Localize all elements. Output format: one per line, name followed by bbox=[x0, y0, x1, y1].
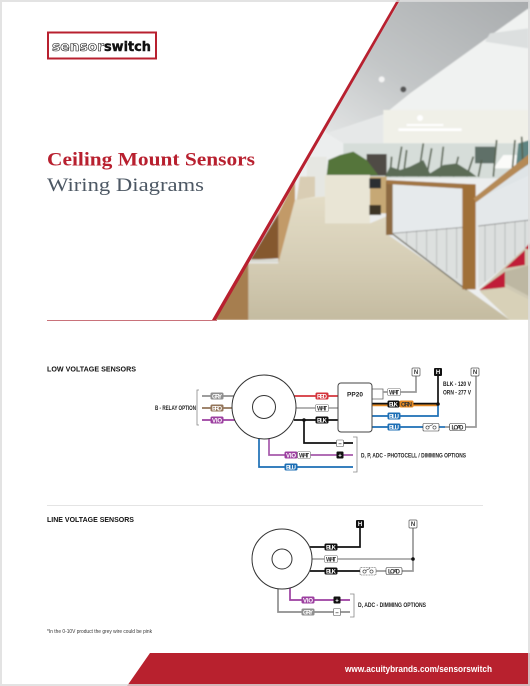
switch symbol bbox=[360, 568, 376, 575]
terminals H N: H bbox=[358, 522, 362, 528]
plus and minus terminals: – bbox=[335, 610, 339, 616]
label: voltages: BLK - 120 V bbox=[443, 381, 472, 388]
terminals H N bbox=[356, 520, 417, 528]
wire tags: WHT bbox=[299, 453, 309, 459]
subtitle: Wiring Diagrams bbox=[47, 175, 204, 196]
terminals H N: N bbox=[411, 522, 415, 528]
footer url: www.acuitybrands.com/sensorswitch bbox=[344, 664, 492, 675]
terminals N H N bbox=[412, 368, 479, 376]
plants bbox=[390, 137, 523, 177]
photo: office interior bbox=[210, 0, 530, 320]
heading: line voltage sensors: LINE VOLTAGE SENSORS bbox=[47, 517, 134, 524]
wire tags: GRY bbox=[303, 610, 313, 616]
plus and minus terminals bbox=[336, 440, 344, 459]
label: relay option: B - RELAY OPTION bbox=[155, 405, 196, 412]
diagram: low voltage wiring bbox=[155, 368, 479, 472]
wire tags: RED bbox=[317, 394, 328, 400]
wire tags: ORN bbox=[401, 402, 412, 408]
wire tags: LOAD bbox=[388, 569, 401, 575]
switch symbol bbox=[423, 424, 439, 431]
footer band bbox=[127, 653, 530, 686]
section divider bbox=[47, 505, 483, 506]
terminals N H N: N bbox=[473, 370, 477, 376]
diagram: line voltage wiring bbox=[252, 520, 427, 617]
wire tags bbox=[210, 388, 466, 471]
wire tags bbox=[302, 544, 402, 616]
label: photocell options: D, P, ADC - PHOTOCELL / DIMMING OPTIONS bbox=[361, 452, 466, 460]
wire tags: VIO bbox=[212, 418, 222, 424]
wire tags: BLK bbox=[326, 545, 337, 551]
plus and minus terminals bbox=[334, 596, 340, 616]
terminals N H N: N bbox=[414, 370, 418, 376]
plus and minus terminals: + bbox=[338, 453, 342, 459]
heading: low voltage sensors: LOW VOLTAGE SENSORS bbox=[47, 366, 136, 374]
logo: sensorswitch bbox=[48, 32, 156, 58]
wire tags: BLK bbox=[326, 569, 337, 575]
diagram: low voltage wiring: PP20 bbox=[347, 392, 363, 398]
wire tags: BLU bbox=[286, 465, 296, 471]
logo: sensorswitch: sensor bbox=[52, 40, 105, 55]
wire tags: VIO bbox=[303, 598, 313, 604]
wire tags: BLK bbox=[317, 418, 328, 424]
wire tags: VIO bbox=[286, 453, 296, 459]
label: dimming options: D, ADC - DIMMING OPTIONS bbox=[358, 602, 427, 609]
terminals N H N: H bbox=[436, 370, 440, 376]
wire tags: BLU bbox=[389, 414, 399, 420]
wire tags: GRY bbox=[212, 394, 222, 400]
diagram: low voltage wiring: ORN - 277 V bbox=[443, 390, 471, 396]
wire tags: LOAD bbox=[452, 425, 464, 431]
footnote: *In the 0-10V product the grey wire could be pink bbox=[47, 629, 152, 635]
heading rule bbox=[47, 320, 217, 321]
wire tags: WHT bbox=[389, 390, 399, 396]
plus and minus terminals: + bbox=[335, 598, 339, 604]
title: Ceiling Mount Sensors bbox=[47, 150, 255, 170]
plus and minus terminals: – bbox=[338, 442, 342, 448]
wire tags: WHT bbox=[326, 557, 336, 563]
wire tags: BLU bbox=[389, 425, 399, 431]
red diagonal stripe bbox=[212, 0, 400, 320]
wire tags: BLK bbox=[389, 402, 399, 408]
logo: sensorswitch: switch bbox=[104, 40, 151, 55]
wire tags: WHT bbox=[317, 406, 327, 412]
wire tags: BRO bbox=[212, 406, 222, 412]
